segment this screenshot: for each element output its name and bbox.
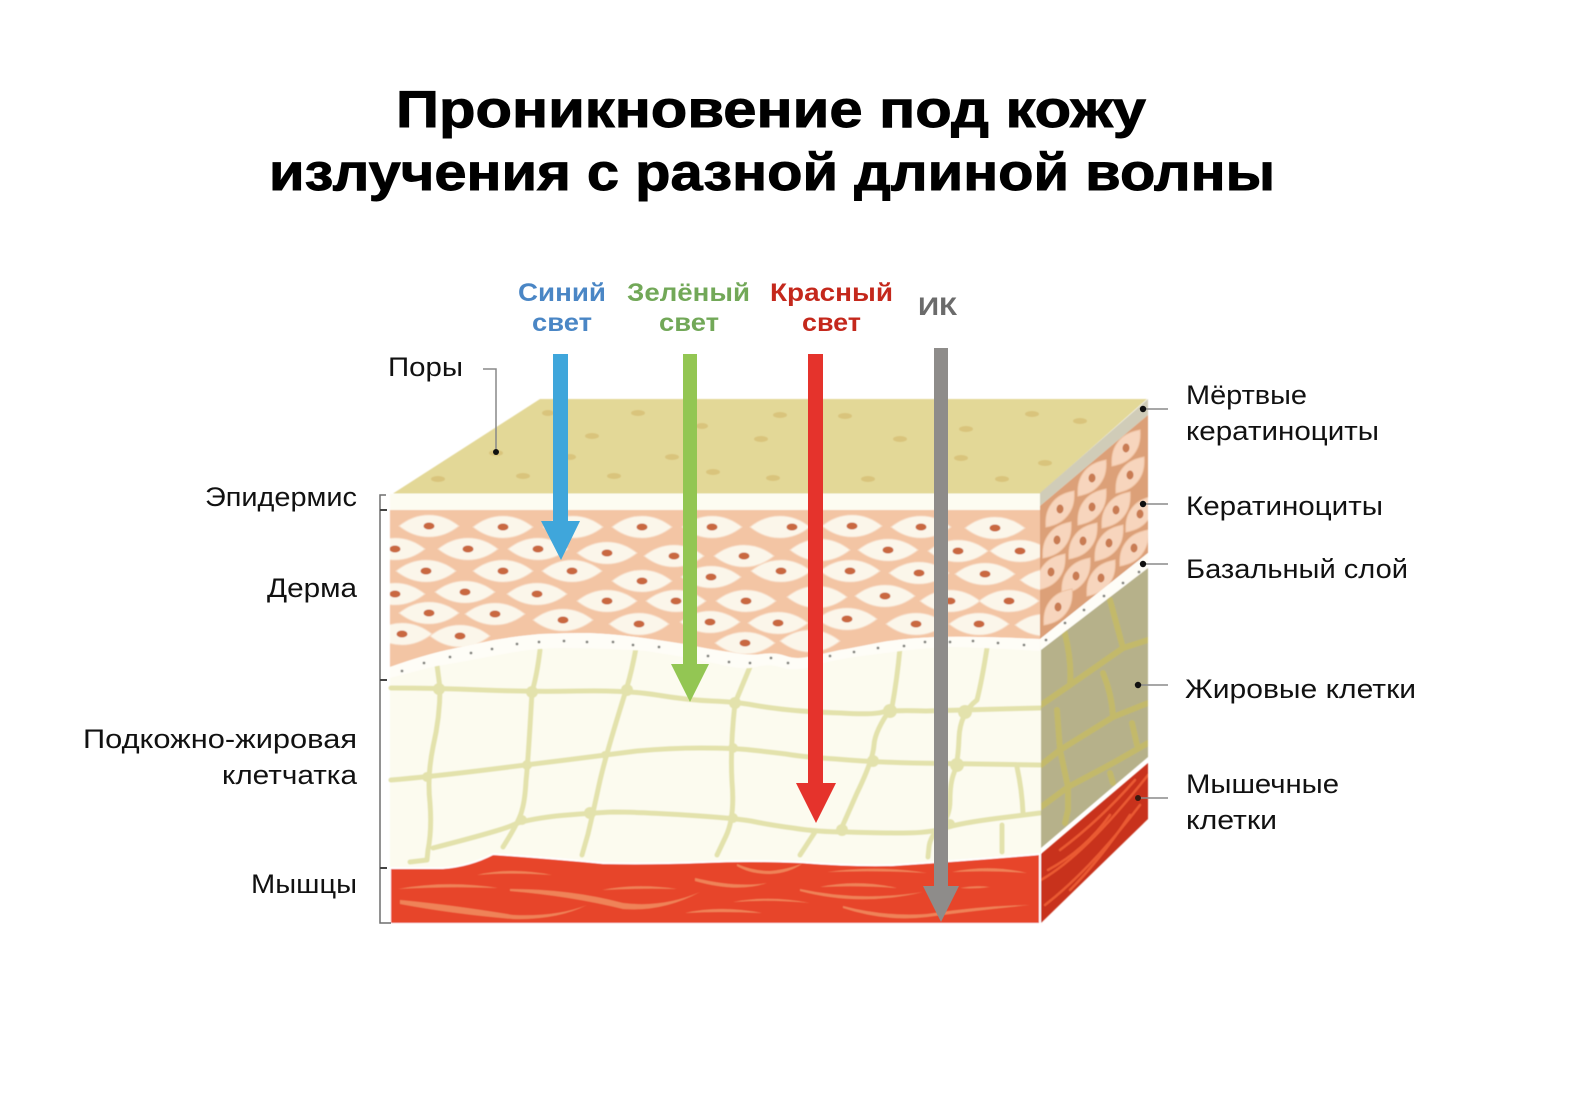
arrow: infrared [923, 348, 959, 922]
label: muscle cells: Мышечные [1186, 769, 1339, 799]
label: red light: свет [802, 309, 861, 337]
right side: keratinocyte face [1039, 399, 1149, 647]
infographic: skin layers and light penetration [86, 90, 1414, 924]
label: green light [627, 279, 750, 337]
label: muscle cells [1186, 769, 1339, 835]
label: red light: Красный [770, 279, 893, 307]
leader dots: right side [1135, 406, 1168, 801]
title [269, 81, 1275, 202]
label: green light: свет [659, 309, 719, 337]
side basal band [1040, 553, 1148, 650]
subcutaneous fat front [390, 640, 1041, 872]
muscle front [390, 854, 1040, 924]
title: Проникновение под кожу [396, 81, 1146, 139]
leader: pores [483, 369, 499, 455]
label: dermis: Дерма [267, 573, 358, 603]
label: blue light: Синий [518, 279, 606, 307]
arrow: blue light [541, 354, 580, 560]
left bracket [380, 495, 391, 923]
label: pores: Поры [388, 352, 463, 382]
label: subcutaneous fat: Подкожно-жировая [83, 724, 357, 754]
label: blue light [518, 279, 606, 337]
label: muscles: Мышцы [251, 869, 357, 899]
title: излучения с разной длиной волны [269, 144, 1275, 202]
label: dead keratinocytes: кератиноциты [1186, 416, 1379, 446]
arrow: red light [796, 354, 836, 823]
label: keratinocytes: Кератиноциты [1186, 491, 1383, 521]
arrow: green light [671, 354, 709, 702]
label: subcutaneous fat [83, 724, 358, 790]
label: dead keratinocytes: Мёртвые [1186, 380, 1307, 410]
label: muscle cells: клетки [1186, 805, 1277, 835]
right side: muscle face [1041, 763, 1148, 923]
label: green light: Зелёный [627, 279, 750, 307]
label: fat cells: Жировые клетки [1185, 674, 1416, 704]
label: basal layer: Базальный слой [1186, 554, 1408, 584]
label: dead keratinocytes [1186, 380, 1379, 446]
label: subcutaneous fat: клетчатка [222, 760, 358, 790]
right side: fat face [1041, 568, 1148, 848]
basal layer band with dots [390, 633, 1040, 678]
top surface with pores [393, 399, 1147, 494]
label: infrared: ИК [918, 293, 958, 321]
skin block illustration [365, 399, 1162, 924]
dermis: cell layer [389, 510, 1040, 668]
epidermis white band [390, 494, 1040, 510]
label: red light [770, 279, 893, 337]
label: blue light: свет [532, 309, 592, 337]
label: epidermis: Эпидермис [205, 482, 357, 512]
